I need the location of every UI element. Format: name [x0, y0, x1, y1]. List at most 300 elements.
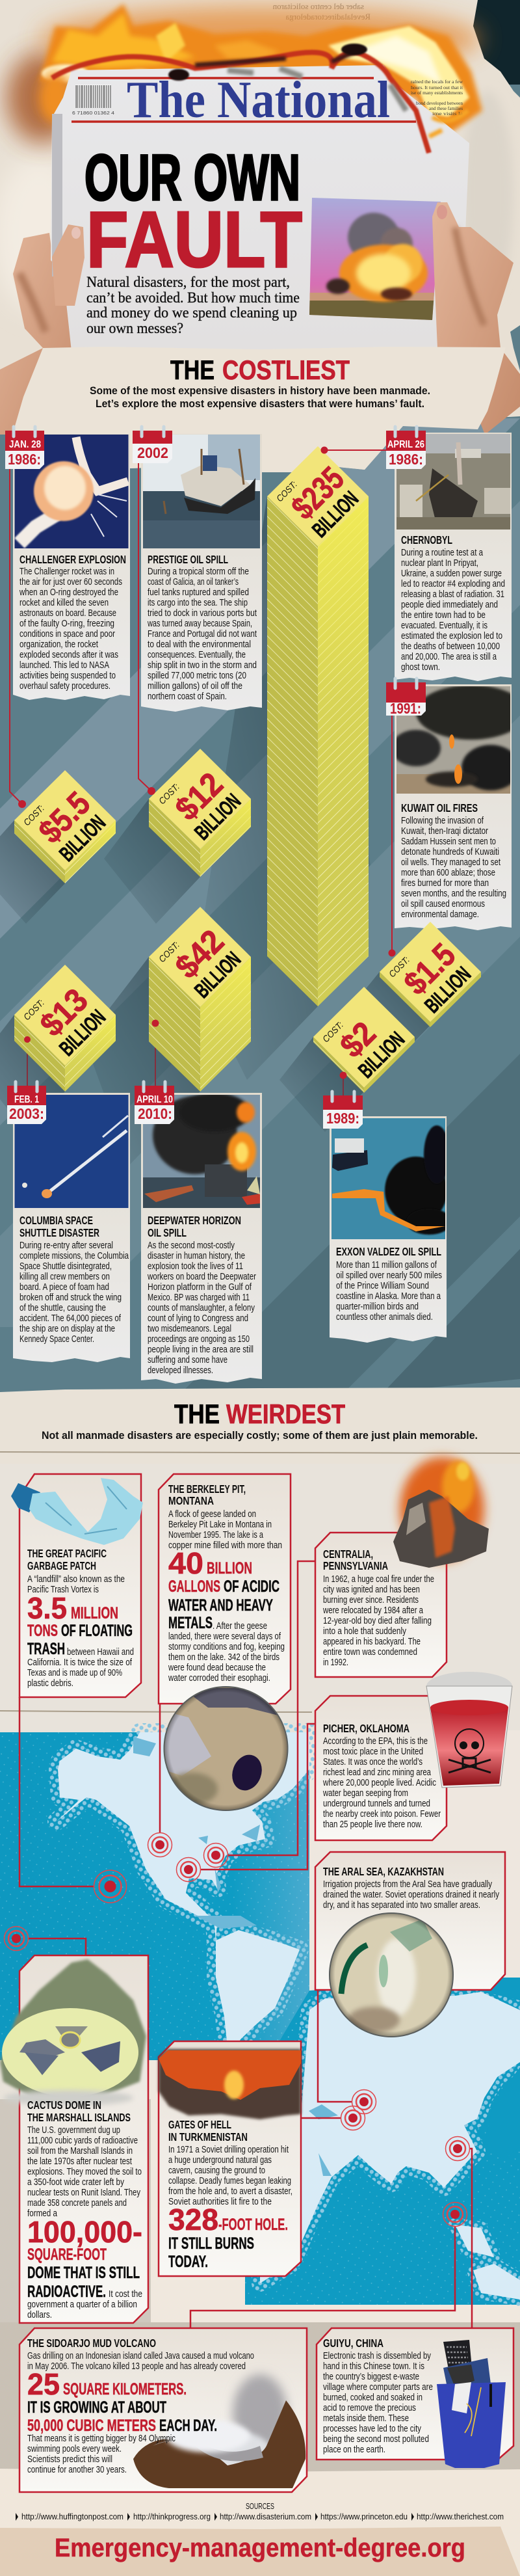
- body and key figure: landed, there were several days of: [168, 1631, 281, 1642]
- cost block: $13 billion: COST:: [21, 997, 46, 1022]
- subheading: Some of the most expensive disasters in history have been manmade.: [90, 384, 430, 397]
- sources: [16, 2501, 504, 2521]
- bottom paper and grey backgrounds: [0, 2060, 520, 2576]
- body text: when an O-ring destroyed the: [19, 587, 118, 598]
- title: OIL SPILL: [148, 1226, 187, 1239]
- cost block: $13 billion: BILLION: [55, 1005, 110, 1060]
- land: Eurasia and Africa: [260, 1992, 520, 2283]
- burned corner small text: ise of many establishments: [411, 90, 463, 96]
- body text: Space Shuttle disintegrated,: [20, 1261, 112, 1272]
- body text: suffering and some have: [148, 1355, 228, 1365]
- date tag: [5, 427, 44, 469]
- body text: hand in this Chinese town. It is: [323, 2361, 424, 2372]
- body and key figure: METALS: [168, 1614, 213, 1632]
- ghost print: saber del centro solicitaron: [272, 1, 364, 11]
- body text: two misdemeanors. Legal: [148, 1324, 231, 1334]
- body and key figure: them on the lake. 342 of the birds: [168, 1652, 280, 1663]
- body text: conditions in space and poor: [20, 629, 115, 639]
- paper background: the weirdest: [0, 1388, 520, 1991]
- title: IN TURKMENISTAN: [168, 2130, 248, 2143]
- body text: processes have led to the city: [323, 2424, 422, 2434]
- title: EXXON VALDEZ OIL SPILL: [336, 1245, 441, 1258]
- body text: village where computer parts are: [323, 2382, 433, 2393]
- sources: http://www.disasterium.com: [220, 2512, 311, 2521]
- sources: http://www.huffingtonpost.com: [21, 2512, 124, 2521]
- intro text: Natural disasters, for the most part,: [86, 274, 290, 290]
- body and key figure: [27, 1574, 134, 1689]
- panel: Guiyu: [317, 2328, 514, 2468]
- subheading: [90, 384, 430, 410]
- body and key figure: WATER AND HEAVY: [168, 1596, 273, 1615]
- burned corner small text: bond developed between: [416, 101, 463, 106]
- body and key figure: between Hawaii and: [67, 1647, 134, 1657]
- body and key figure: government a quarter of a billion: [27, 2300, 137, 2310]
- body and key figure: made 358 concrete panels and: [27, 2198, 127, 2208]
- body text: Kuwait, then-Iraqi dictator: [401, 826, 488, 837]
- body and key figure: EACH DAY.: [159, 2417, 217, 2435]
- body text: France and Portugal did not want: [148, 629, 257, 639]
- title: THE BERKELEY PIT,: [168, 1483, 246, 1496]
- body text: environmental damage.: [401, 909, 479, 920]
- date tag: APRIL 10: [136, 1094, 173, 1105]
- cost block: $235 billion: $235: [284, 460, 351, 526]
- body text: overhaul safety procedures.: [20, 681, 110, 691]
- heading: THE: [170, 355, 214, 385]
- headline: OUR OWN: [84, 141, 300, 213]
- body text: developed illnesses.: [148, 1365, 213, 1376]
- body text: proceedings are ongoing as 150: [148, 1334, 250, 1345]
- cost block: $42 billion: BILLION: [190, 947, 245, 1002]
- body and key figure: TODAY.: [168, 2253, 208, 2271]
- title: PENNSYLVANIA: [323, 1559, 388, 1572]
- icon: burning coal: [393, 1457, 489, 1568]
- burned corner small text: ime visits la: [432, 111, 463, 116]
- panel: Gates of Hell: [159, 2041, 301, 2276]
- body and key figure: in May 2006. The volcano killed 13 people and has already covered: [27, 2361, 246, 2372]
- body text: burning ever since. Residents: [323, 1595, 419, 1605]
- subheading: Let’s explore the most expensive disasters that were humans’ fault.: [96, 397, 424, 410]
- body text: [323, 1879, 500, 1911]
- image: dome with radiation symbol: [0, 1959, 146, 2106]
- date tag: 1986:: [8, 451, 41, 468]
- body text: [323, 2351, 433, 2455]
- cost block: $5.5 billion: [0, 770, 116, 924]
- body text: count of lying to Congress and: [148, 1313, 248, 1324]
- body text: appeared in his backyard. The: [323, 1637, 421, 1647]
- body and key figure: That means it is getting bigger by 84 Olympic: [27, 2434, 176, 2444]
- land: Americas: [57, 1732, 309, 2060]
- title: KUWAIT OIL FIRES: [401, 801, 478, 814]
- icon: crushed plastic bottle: [11, 1478, 143, 1545]
- body text: its cargo into the sea. The ship: [148, 598, 248, 608]
- body text: In 1962, a huge coal fire under the: [323, 1574, 434, 1585]
- heading: the weirdest: WEIRDEST: [226, 1399, 345, 1429]
- cost block: $1.5 billion: $1.5: [396, 936, 462, 1002]
- fire above newspaper: [6, 4, 482, 143]
- body and key figure: plastic debris.: [27, 1678, 73, 1689]
- title: GARBAGE PATCH: [27, 1559, 96, 1572]
- body and key figure: TONS: [27, 1622, 58, 1640]
- burned corner small text: hours. It turned out that it: [411, 85, 463, 90]
- body text: More than 11 million gallons of: [336, 1260, 437, 1270]
- body and key figure: explosions. They moved the soil to: [27, 2167, 142, 2177]
- body and key figure: Scientists predict this will: [27, 2454, 112, 2465]
- ghost print: [153, 1, 370, 436]
- body and key figure: [27, 2351, 254, 2475]
- map markers: [4, 1833, 469, 2226]
- masthead barcode: [72, 85, 114, 116]
- body text: in 1992.: [323, 1657, 348, 1668]
- body text: rocket and killed the seven: [20, 598, 109, 608]
- body and key figure: The U.S. government dug up: [27, 2125, 120, 2136]
- ghost print: Revelaladirectoradelorga: [285, 12, 370, 21]
- section band: the costliest: [13, 347, 506, 472]
- cost block: $12 billion: $12: [168, 765, 230, 827]
- photo: Kuwait: [396, 686, 510, 794]
- body and key figure: nuclear tests on Runit Island. They: [27, 2188, 141, 2198]
- body and key figure: OF FLOATING: [61, 1622, 133, 1640]
- body text: [19, 567, 122, 691]
- body text: evacuated. Eventually, it is: [401, 621, 488, 631]
- body text: [336, 1260, 442, 1322]
- burned corner small text: ralned the locals for a few: [411, 79, 463, 85]
- body text: the ship are on display at the: [20, 1324, 115, 1334]
- photo: Deepwater: [143, 1093, 260, 1210]
- body text: [401, 816, 506, 920]
- card: Kuwait oil fires: [386, 678, 520, 930]
- body and key figure: [168, 1509, 285, 1684]
- body and key figure: California. It is twice the size of: [27, 1657, 133, 1668]
- masthead rules: [72, 78, 416, 122]
- date tag: 2003:: [9, 1105, 44, 1122]
- cost block: $2 billion: COST:: [320, 1019, 345, 1044]
- body text: As the second most-costly: [148, 1241, 235, 1251]
- body text: board. A piece of foam had: [20, 1282, 109, 1293]
- body and key figure: formed a: [27, 2208, 58, 2219]
- sources: SOURCES: [246, 2501, 274, 2511]
- body text: During a tropical storm off the: [148, 567, 249, 577]
- body and key figure: copper mine filled with more than: [168, 1540, 282, 1551]
- body and key figure: stormy conditions and fog, keeping: [168, 1642, 285, 1652]
- body text: counts of manslaughter, a felony: [148, 1303, 255, 1313]
- body text: were relocated by 1984 after a: [322, 1605, 424, 1616]
- body and key figure: the late 1970s after nuclear test: [27, 2156, 132, 2167]
- cost block: $5.5 billion: COST:: [21, 803, 46, 827]
- intro text: [86, 274, 300, 336]
- body text: The Challenger rocket was in: [20, 567, 114, 577]
- body and key figure: 100,000-: [27, 2215, 142, 2249]
- newspaper: [51, 65, 469, 351]
- date tag: JAN. 28: [9, 439, 41, 450]
- body and key figure: A flock of geese landed on: [168, 1509, 256, 1520]
- cost block: $2 billion: BILLION: [354, 1027, 409, 1082]
- masthead title: The National: [127, 72, 390, 129]
- body text: to deal with the environmental: [148, 639, 251, 650]
- panel: Picher: [315, 1672, 512, 1840]
- body text: metals inside them. These: [323, 2413, 409, 2424]
- title: THE GREAT PACIFIC: [27, 1547, 107, 1560]
- date tag: 1986:: [389, 451, 423, 468]
- body text: Mexico. BP was charged with 11: [148, 1293, 250, 1303]
- intro text: and money do we spend cleaning up: [86, 304, 297, 321]
- title: PRESTIGE OIL SPILL: [148, 553, 228, 566]
- body text: During re-entry after several: [20, 1241, 113, 1251]
- panel: Cactus Dome: [0, 1955, 148, 2323]
- cost block: $13 billion: [0, 965, 116, 1132]
- title: [20, 1214, 99, 1239]
- panel: Berkeley Pit: [159, 1474, 291, 1704]
- connector lines: weirdest: [20, 1561, 472, 2328]
- masthead barcode: 6 71860 01362 4: [72, 111, 114, 116]
- body and key figure: dollars.: [27, 2310, 52, 2320]
- body text: of the faulty O-ring, freezing: [20, 619, 114, 629]
- body and key figure: BILLION: [207, 1559, 252, 1577]
- land: Australia and islands: [455, 2225, 520, 2300]
- card: Prestige oil spill: [133, 427, 262, 712]
- body and key figure: It cost the: [109, 2289, 142, 2300]
- image: mud volcano: [133, 2374, 306, 2488]
- body text: fuel tanks ruptured and spilled: [148, 587, 249, 598]
- cost block: $2 billion: $2: [333, 1014, 383, 1065]
- body text: the entire town had to be: [401, 610, 486, 621]
- date tag: 2010:: [138, 1105, 172, 1122]
- cost block: $5.5 billion: $5.5: [31, 785, 97, 850]
- body and key figure: a huge underground natural gas: [168, 2155, 272, 2166]
- body and key figure: TRASH: [27, 1640, 65, 1658]
- body and key figure: SQUARE-FOOT: [27, 2246, 107, 2264]
- intro text: can’t be avoided. But how much time: [86, 289, 300, 306]
- sources: https://www.princeton.edu: [320, 2512, 408, 2521]
- cost block: $2 billion: [280, 987, 415, 1132]
- headline: FAULT: [86, 195, 302, 284]
- background: teal diagonal stripes: [0, 0, 520, 1392]
- title: [27, 2099, 131, 2124]
- body text: dry, and it has separated into two smaller areas.: [323, 1900, 480, 1911]
- body text: tried to dock in various ports but: [148, 608, 257, 619]
- body and key figure: cavern, causing the ground to: [168, 2166, 265, 2176]
- body text: than 25 people live there now.: [323, 1819, 422, 1830]
- card: Chernobyl: [386, 427, 512, 681]
- date tag: [7, 1082, 46, 1124]
- body and key figure: Berkeley Pit Lake in Montana in: [168, 1520, 272, 1530]
- cost block: $12 billion: [104, 749, 251, 924]
- body and key figure: swimming pools every week.: [27, 2444, 122, 2454]
- lens image: Berkeley Pit aerial: [162, 1685, 289, 1812]
- body and key figure: IT STILL BURNS: [168, 2234, 254, 2253]
- body text: launched. This led to NASA: [20, 660, 109, 671]
- date tag: 2002: [137, 444, 168, 461]
- body and key figure: [168, 2145, 292, 2271]
- left thumb: [52, 224, 84, 306]
- body and key figure: . After the geese: [213, 1621, 267, 1631]
- title: THE SIDOARJO MUD VOLCANO: [27, 2337, 156, 2350]
- body and key figure: soil from the Marshall Islands in: [27, 2146, 133, 2156]
- body and key figure: were found dead because the: [168, 1663, 266, 1673]
- panel: Centralia: [315, 1457, 489, 1677]
- photo: Exxon: [332, 1118, 452, 1240]
- burnt paper edge: [52, 44, 468, 153]
- panel: Aral Sea: [315, 1852, 505, 1990]
- body text: Horizon platform in the Gulf of: [148, 1282, 252, 1293]
- photo: burning crater: [159, 2049, 301, 2119]
- body text: burned, cooked and soaked in: [323, 2393, 422, 2403]
- block top overlapping Kuwait card: [389, 922, 448, 956]
- cost block: $42 billion: $42: [168, 922, 231, 986]
- body text: into a hole that suddenly: [323, 1626, 407, 1637]
- body text: nuclear plant In Pripyat,: [401, 558, 478, 569]
- cost block: $235 billion: BILLION: [307, 487, 363, 542]
- body text: people died immediately and: [401, 600, 498, 610]
- body text: the air for just over 60 seconds: [20, 577, 122, 587]
- panel: Great Pacific garbage patch: [11, 1474, 143, 1697]
- body and key figure: 111,000 cubic yards of radioactive: [27, 2136, 138, 2146]
- card: Challenger explosion: [5, 427, 130, 700]
- body text: 12-year-old boy died after falling: [323, 1616, 432, 1626]
- cost block: $1.5 billion: COST:: [387, 954, 411, 979]
- body and key figure: IT IS GROWING AT ABOUT: [27, 2398, 166, 2417]
- body text: organization, the rocket: [20, 639, 98, 650]
- body text: disaster in human history, the: [148, 1251, 245, 1261]
- cost block: $12 billion: BILLION: [190, 789, 245, 844]
- title: CHERNOBYL: [401, 533, 452, 546]
- body and key figure: collapse. Deadly fumes began leaking: [168, 2176, 291, 2186]
- body text: underground tunnels and turned: [323, 1799, 430, 1809]
- body text: spilled 77,000 metric tons (20: [148, 671, 246, 681]
- ghost print: violencia adelanto: [153, 427, 214, 436]
- body text: of the Prince William Sound: [336, 1281, 429, 1291]
- body and key figure: water corroded their esophagi.: [168, 1673, 270, 1684]
- body and key figure: SQUARE KILOMETERS.: [63, 2380, 187, 2398]
- heading: the weirdest: [42, 1399, 478, 1442]
- sources: http://www.therichest.com: [417, 2512, 504, 2521]
- body and key figure: from the hole and, to avert a disaster,: [168, 2186, 292, 2197]
- body text: [322, 1736, 441, 1830]
- body text: city was ignited and has been: [323, 1585, 420, 1595]
- body text: countless other animals died.: [336, 1312, 433, 1322]
- body and key figure: 50,000 CUBIC METERS: [27, 2417, 156, 2435]
- sources: http://thinkprogress.org: [133, 2512, 211, 2521]
- title: [27, 1547, 107, 1572]
- card: Exxon Valdez oil spill: [323, 1092, 452, 1343]
- body and key figure: -FOOT HOLE.: [218, 2216, 288, 2234]
- hero paper background: [0, 0, 520, 472]
- body text: broken off and struck the wing: [20, 1293, 122, 1303]
- body and key figure: A “landfill” also known as the: [27, 1574, 125, 1585]
- body text: oil spilled over nearly 500 miles: [336, 1270, 442, 1281]
- body text: workers on board the Deepwater: [147, 1272, 256, 1282]
- ghost print: sobre la mujer del centro: [287, 427, 370, 436]
- body text: complete missions, the Columbia: [20, 1251, 129, 1261]
- body text: oil spill caused enormous: [401, 899, 485, 909]
- world map: [0, 1732, 520, 2305]
- body text: entire town was condemned: [323, 1647, 417, 1657]
- cost block: $13 billion: $13: [33, 981, 95, 1043]
- right hand: [432, 202, 520, 435]
- body text: killing all crew members on: [20, 1272, 110, 1282]
- body text: consequences. Eventually, the: [148, 650, 246, 660]
- inland seas: [133, 1737, 338, 2176]
- cost block: $235 billion: COST:: [274, 479, 299, 503]
- body and key figure: Texas and is made up of 90%: [27, 1668, 122, 1678]
- body text: activities being suspended to: [20, 671, 116, 681]
- body text: Electronic trash is dissembled by: [323, 2351, 432, 2361]
- body and key figure: In 1971 a Soviet drilling operation hit: [168, 2145, 289, 2155]
- title: [323, 1548, 388, 1572]
- cost block: $1.5 billion: [344, 922, 481, 1067]
- card: Columbia space shuttle disaster: [7, 1082, 130, 1362]
- lens image: Aral Sea satellite: [328, 1912, 455, 2039]
- body and key figure: Soviet authorities lit fire to the: [168, 2197, 272, 2207]
- title: THE MARSHALL ISLANDS: [27, 2111, 131, 2124]
- body and key figure: DOME THAT IS STILL: [27, 2264, 140, 2282]
- photo: Chernobyl: [396, 434, 510, 530]
- body text: States. It was once the world’s: [323, 1757, 422, 1767]
- body and key figure: 25: [27, 2367, 60, 2401]
- date tag: [323, 1092, 363, 1129]
- footer URL: Emergency-management-degree.org: [55, 2534, 465, 2562]
- body text: detonate hundreds of Kuwaiti: [401, 847, 499, 857]
- body and key figure: [27, 2125, 142, 2320]
- body text: astronauts on board. Because: [20, 608, 116, 619]
- cost block: $42 billion: [84, 907, 251, 1164]
- body text: being the second most polluted: [323, 2434, 429, 2445]
- body text: Following the invasion of: [401, 816, 484, 826]
- body text: exploded seconds after it was: [20, 650, 118, 660]
- panel: Sidoarjo mud volcano: [20, 2328, 307, 2492]
- title: [168, 2118, 248, 2143]
- body and key figure: MILLION: [71, 1604, 118, 1622]
- newspaper photo: explosion: [306, 195, 445, 322]
- body text: northern coast of Spain.: [148, 691, 227, 702]
- title: [148, 1214, 241, 1239]
- cost block: $42 billion: COST:: [157, 939, 181, 964]
- body text: fires burned for more than: [401, 878, 489, 889]
- body text: coast of Galicia, an oil tanker’s: [148, 577, 239, 587]
- title: CHALLENGER EXPLOSION: [20, 553, 126, 566]
- body text: [401, 548, 505, 673]
- body text: [20, 1241, 129, 1345]
- body text: coastline in Alaska. More than a: [336, 1291, 441, 1302]
- body and key figure: continue for another 30 years.: [27, 2465, 127, 2475]
- body text: ship split in two in the storm and: [148, 660, 257, 671]
- title: SHUTTLE DISASTER: [20, 1226, 99, 1239]
- cost block: $5.5 billion: BILLION: [55, 811, 110, 866]
- body and key figure: RADIOACTIVE.: [27, 2283, 106, 2301]
- intro text: our own messes?: [86, 320, 183, 336]
- body and key figure: a 350-foot wide crater left by: [27, 2177, 125, 2188]
- body text: people living in the area are still: [148, 1345, 254, 1355]
- body text: [147, 567, 257, 702]
- body text: acid to remove the precious: [323, 2403, 416, 2413]
- date tag: APRIL 26: [387, 439, 424, 450]
- date tag: [135, 1082, 174, 1124]
- body text: the country’s biggest e-waste: [323, 2372, 419, 2382]
- photo: Columbia: [14, 1095, 129, 1209]
- icon: glass of poison with skull: [426, 1672, 512, 1788]
- body and key figure: 40: [168, 1546, 203, 1580]
- body and key figure: OF ACIDIC: [224, 1577, 280, 1596]
- body text: richest lead and zinc mining area: [323, 1767, 432, 1778]
- title: PICHER, OKLAHOMA: [323, 1722, 410, 1735]
- title: CENTRALIA,: [323, 1548, 373, 1561]
- photo: Prestige: [143, 435, 260, 550]
- body text: Kennedy Space Center.: [20, 1334, 94, 1345]
- body text: where 20,000 people lived. Acidic: [322, 1778, 436, 1788]
- left hand: [0, 224, 84, 435]
- body text: million gallons) of oil off the: [148, 681, 242, 691]
- date tag: 1989:: [326, 1110, 359, 1127]
- title: COLUMBIA SPACE: [20, 1214, 93, 1227]
